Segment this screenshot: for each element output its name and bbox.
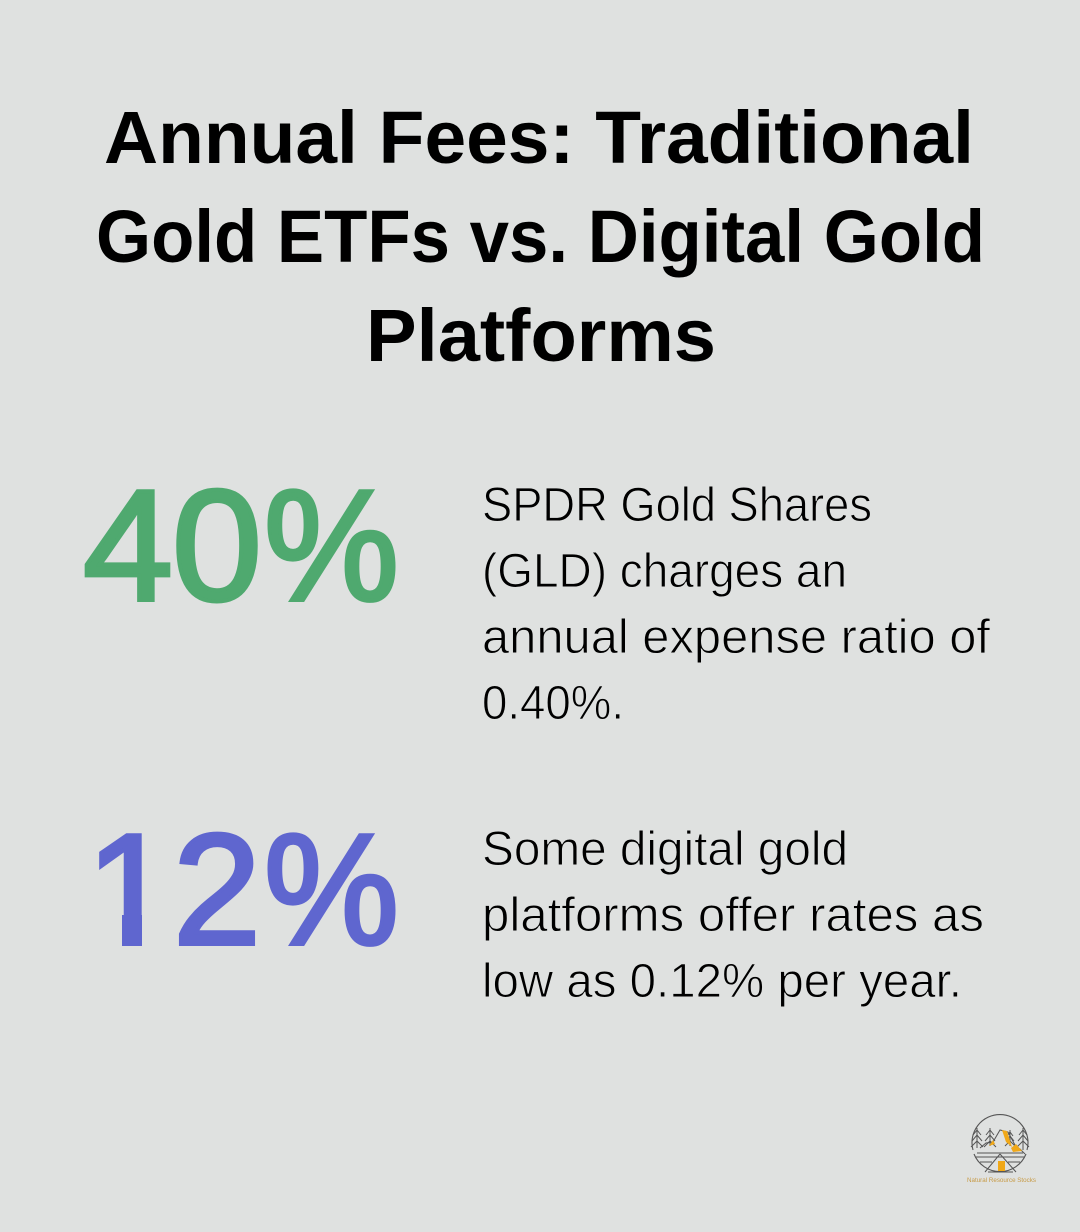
- text block: digital gold platform rates: platforms offer rates as: [482, 889, 984, 942]
- title: Annual Fees: Traditional: [104, 96, 974, 179]
- statistic: 12%: 1: [86, 802, 174, 978]
- text block: SPDR Gold Shares fee: 0.40%.: [482, 677, 624, 730]
- title: Platforms: [366, 294, 716, 377]
- statistic: 40%: [83, 458, 399, 634]
- text block: SPDR Gold Shares fee: (GLD) charges an: [482, 545, 847, 598]
- logo: Natural Resource Stocks: [967, 1115, 1036, 1184]
- text block: SPDR Gold Shares fee: annual expense ratio of: [482, 611, 991, 664]
- text block: digital gold platform rates: low as 0.12% per year.: [482, 955, 962, 1008]
- text block: digital gold platform rates: Some digital gold: [482, 823, 848, 876]
- statistic: 12%: %: [264, 802, 399, 978]
- statistic: 40%: 0: [172, 458, 262, 634]
- statistic: 40%: %: [264, 458, 399, 634]
- statistic: 12%: 2: [173, 802, 261, 978]
- icon: circular mountain emblem: [971, 1115, 1029, 1172]
- statistic: 40%: 4: [83, 458, 173, 634]
- text block: SPDR Gold Shares fee: [482, 479, 991, 730]
- text block: SPDR Gold Shares fee: SPDR Gold Shares: [482, 479, 872, 532]
- logo wordmark: Natural Resource Stocks: [967, 1177, 1036, 1184]
- statistic: 12%: [86, 802, 399, 978]
- title: Gold ETFs vs. Digital Gold: [96, 195, 985, 278]
- title: [96, 96, 985, 377]
- text block: digital gold platform rates: [482, 823, 984, 1008]
